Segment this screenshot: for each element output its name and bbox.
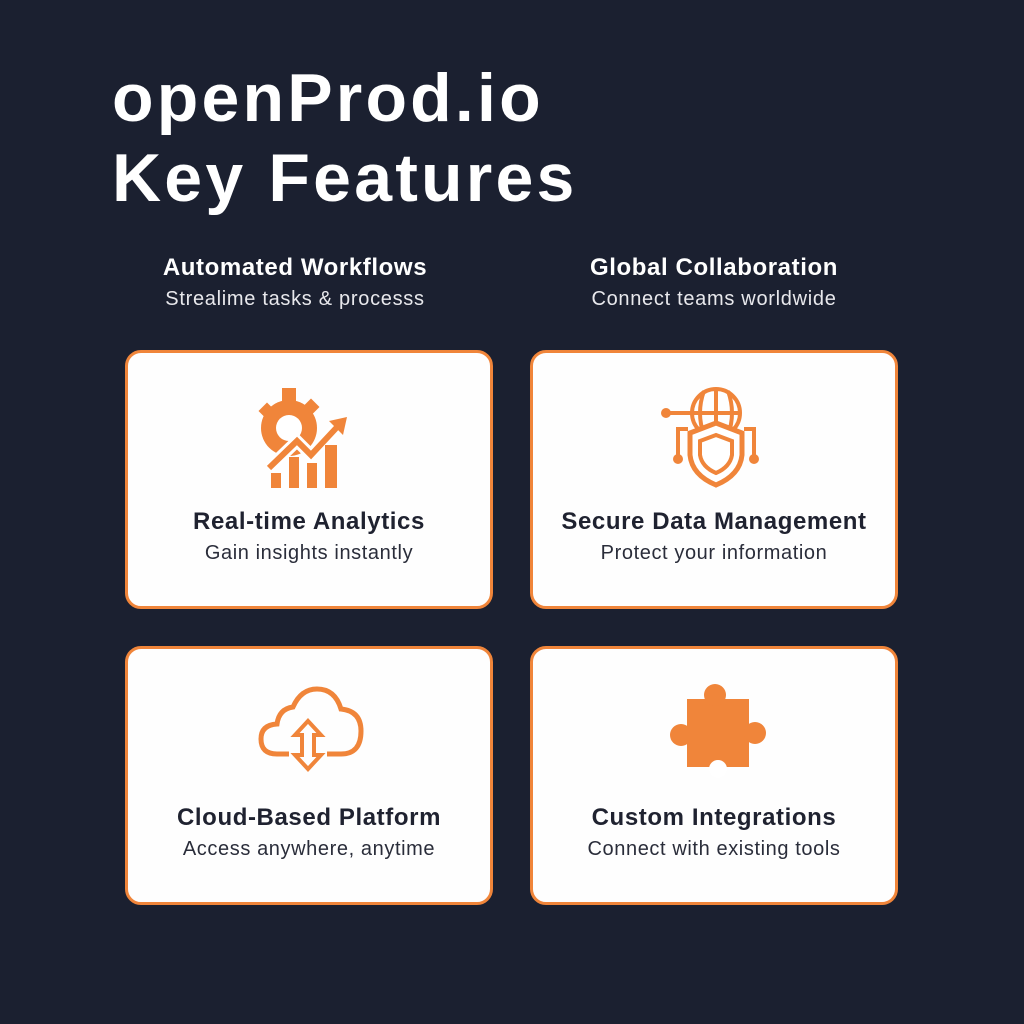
panel: real-time analytics: Real-time Analytics — [193, 508, 425, 535]
panel: real-time analytics: Gain insights instantly — [205, 542, 413, 564]
heading: automated workflows: Automated Workflows — [163, 254, 427, 281]
panel: secure data management: Secure Data Management — [561, 508, 867, 535]
heading: global collaboration — [590, 254, 838, 310]
panel: secure data management: Protect your information — [601, 542, 827, 564]
icon: gear chart — [258, 388, 347, 488]
panel: cloud-based platform: Access anywhere, anytime — [183, 838, 435, 860]
title: Key Features — [112, 140, 578, 216]
panel: real-time analytics — [125, 350, 493, 609]
panel: cloud-based platform: Cloud-Based Platform — [177, 804, 441, 831]
heading: automated workflows: Strealime tasks & processs — [165, 288, 425, 310]
panel: secure data management — [530, 350, 898, 609]
panel: custom integrations: Custom Integrations — [592, 804, 836, 831]
icon: cloud — [258, 686, 364, 772]
panel: custom integrations — [530, 646, 898, 905]
title: openProd.io — [112, 60, 544, 136]
title — [112, 60, 578, 216]
heading: automated workflows — [163, 254, 427, 310]
panel: custom integrations: Connect with existing tools — [588, 838, 840, 860]
heading: global collaboration: Global Collaboration — [590, 254, 838, 281]
panel: cloud-based platform — [125, 646, 493, 905]
icon: globe shield — [661, 387, 759, 488]
heading: global collaboration: Connect teams worldwide — [591, 288, 837, 310]
icon: puzzle — [670, 684, 766, 767]
